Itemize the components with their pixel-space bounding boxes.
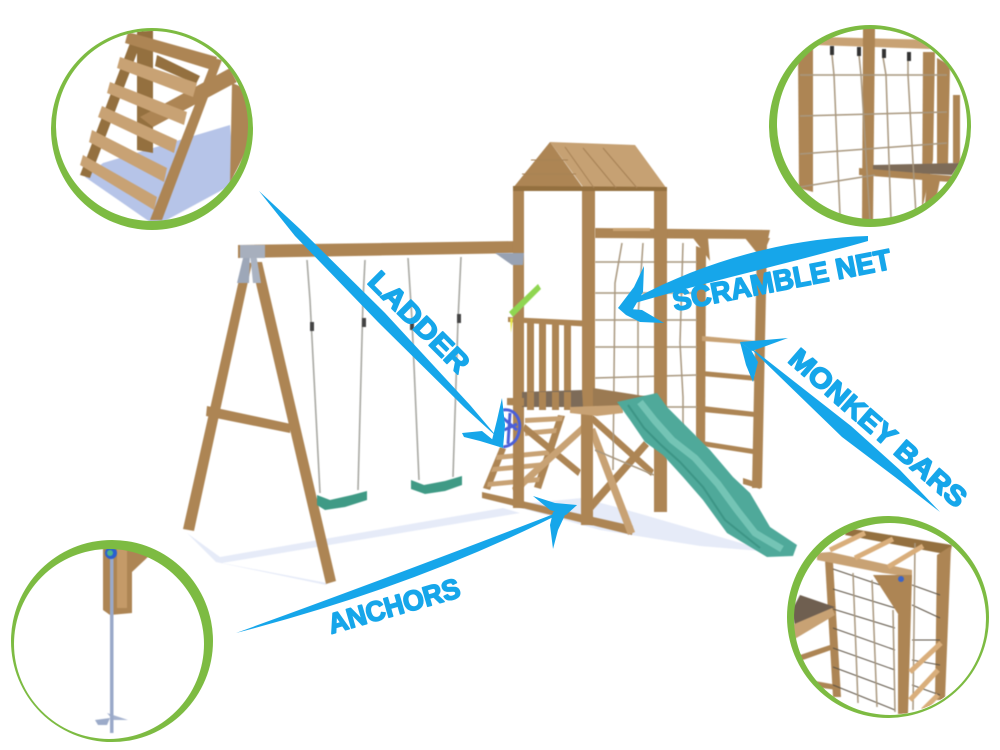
- monkey bars rear frame: [595, 228, 770, 489]
- swing bracket: [495, 253, 524, 265]
- swing frame legs: [183, 254, 336, 584]
- arrow: monkey bars: [740, 338, 940, 512]
- arrow: ladder: [259, 191, 505, 448]
- roof: [513, 142, 667, 191]
- detail circle: scramble net: [769, 25, 971, 227]
- arrow: anchors: [236, 496, 577, 633]
- detail circle: anchors: [11, 540, 213, 742]
- swing 2: [408, 257, 462, 494]
- swing set: [183, 241, 522, 584]
- detail circle: monkey bars: [787, 516, 989, 718]
- tower posts: [513, 189, 667, 525]
- slide: [617, 393, 797, 557]
- tower: [495, 142, 667, 525]
- swing top beam: [238, 241, 522, 258]
- ground shadows: [187, 498, 772, 585]
- scramble net: [595, 243, 697, 475]
- steering wheel: [503, 410, 520, 447]
- label: monkey bars: MONKEY BARS: [783, 342, 973, 514]
- arrow: scramble net: [618, 236, 868, 323]
- label: anchors: ANCHORS: [324, 572, 464, 640]
- swing 1: [307, 260, 367, 510]
- green periscope: [509, 284, 541, 333]
- ladder steps and lower braces: [482, 415, 654, 535]
- platform: [507, 388, 650, 416]
- label: scramble net: SCRAMBLE NET: [670, 244, 894, 318]
- detail circle: ladder: [51, 28, 253, 230]
- railing: [508, 317, 593, 410]
- label: ladder: LADDER: [362, 265, 476, 379]
